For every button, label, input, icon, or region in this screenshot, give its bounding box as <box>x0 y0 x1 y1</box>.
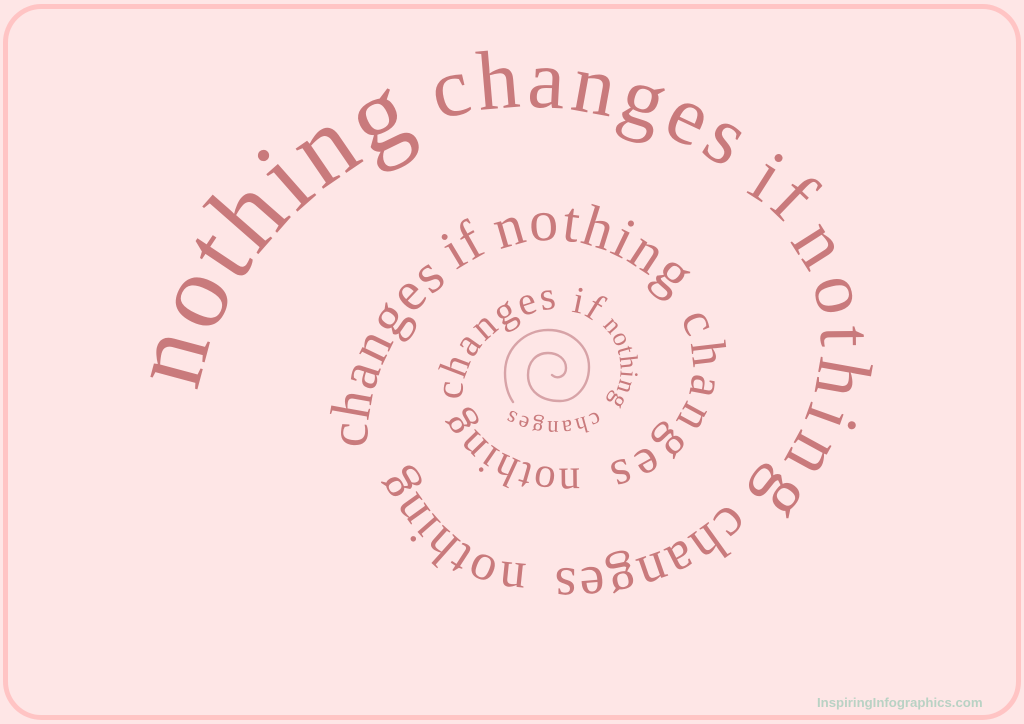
second ring text: nothing: nothing <box>381 466 526 588</box>
outer ring text: if: if <box>746 154 822 222</box>
inner ring text: changes: changes <box>438 290 555 398</box>
inner ring text: nothing: nothing <box>602 318 638 408</box>
second ring text: changes: changes <box>556 508 741 595</box>
inner ring text: changes: changes <box>507 411 600 433</box>
outer ring text: nothing: nothing <box>749 224 873 518</box>
outer ring text: nothing: nothing <box>150 88 419 390</box>
inner ring text: if: if <box>572 288 608 320</box>
second ring text: changes: changes <box>330 264 444 446</box>
second ring text: if: if <box>442 218 485 270</box>
second ring text: nothing: nothing <box>494 204 690 300</box>
third ring text: nothing: nothing <box>444 408 580 489</box>
third ring text: changes: changes <box>611 314 726 484</box>
icon: centre spiral line <box>505 330 589 402</box>
credit: InspiringInfographics.com <box>817 695 983 710</box>
spiral text <box>150 50 873 595</box>
outer ring text: changes: changes <box>436 50 742 164</box>
